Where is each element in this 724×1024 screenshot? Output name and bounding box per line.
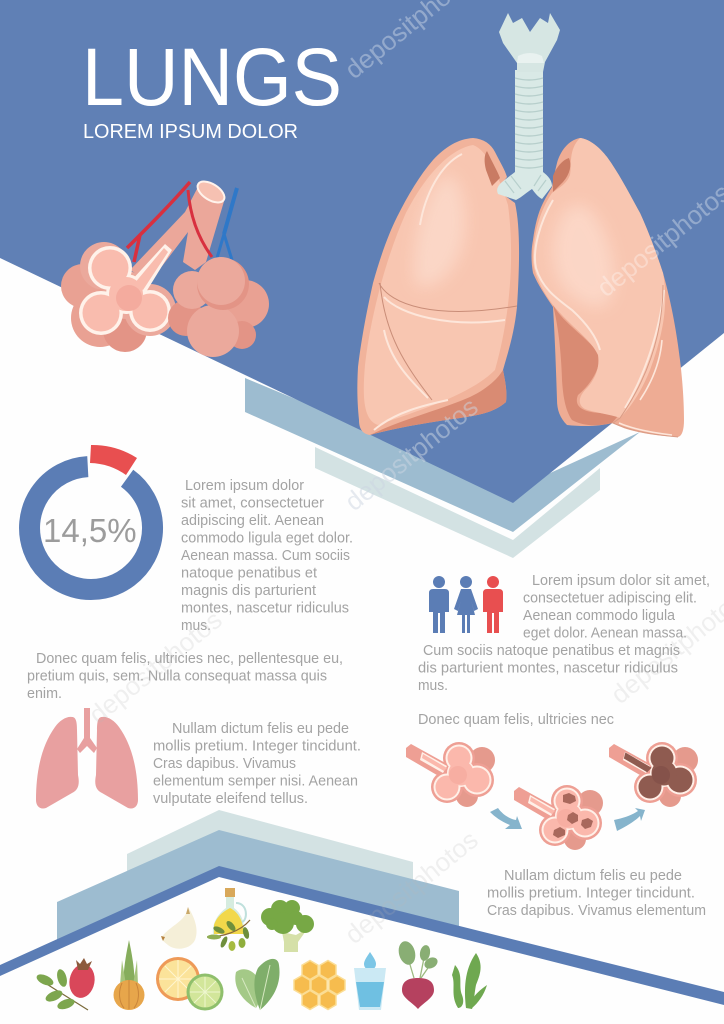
text block: donec paragraph: pretium quis, sem. Nulla consequat massa quis <box>27 668 327 684</box>
blue ring <box>30 467 153 590</box>
icon: onion <box>114 940 144 1010</box>
text block: donut description: montes, nascetur ridiculus <box>181 600 349 616</box>
pale bottom layer of top chevron <box>315 447 600 558</box>
subtitle: LOREM IPSUM DOLOR <box>83 121 298 143</box>
watermarks over page: depositphotos <box>339 824 484 950</box>
watermarks on header: depositphotos <box>339 391 484 517</box>
text block: donec paragraph: Donec quam felis, ultricies nec, pellentesque eu, <box>36 651 343 667</box>
illustration: healthy alveolus <box>406 742 495 807</box>
text block: donut description: sit amet, consectetuer <box>181 496 324 512</box>
icon: glass of water <box>354 952 386 1010</box>
text block: people description: eget dolor. Aenean massa. <box>523 626 687 642</box>
text block: nullam paragraph: elementum semper nisi. Aenean <box>153 774 358 790</box>
left lung <box>357 138 519 435</box>
illustration: lungs and trachea <box>357 13 684 437</box>
text block: donut description: magnis dis parturient <box>181 583 316 599</box>
title: LUNGS <box>82 32 342 123</box>
text block: people description <box>418 573 710 694</box>
icon: beetroot <box>396 939 440 1009</box>
sectioned cluster <box>61 264 105 308</box>
text block: nullam caption: mollis pretium. Integer tincidunt. <box>487 886 695 902</box>
percentage: 14,5% <box>43 512 137 549</box>
text block: donut description: Lorem ipsum dolor <box>185 478 304 494</box>
arrow: damaged to diseased <box>614 808 645 831</box>
watermarks over page <box>83 584 724 950</box>
text block: nullam paragraph: vulputate eleifend tellus. <box>153 791 308 807</box>
dark blue roof line <box>0 866 724 1005</box>
text block: donut description: Aenean massa. Cum sociis <box>181 548 350 564</box>
watermarks over page: depositphotos <box>83 604 228 730</box>
illustration: damaged alveolus <box>514 785 603 850</box>
text block: nullam paragraph: Cras dapibus. Vivamus <box>153 756 296 772</box>
man <box>429 576 449 633</box>
text block: donut description: adipiscing elit. Aenean <box>181 513 324 529</box>
text block: donut description: mus. <box>181 618 211 634</box>
blue header panel <box>0 0 724 503</box>
light blue layer of bottom roof <box>57 830 459 940</box>
text block: nullam caption: Nullam dictum felis eu pede <box>504 868 682 884</box>
text block: nullam paragraph: mollis pretium. Integer tincidunt. <box>153 738 361 754</box>
light blue layer of top chevron <box>245 378 640 532</box>
text block: donec paragraph: enim. <box>27 686 62 702</box>
arrow: healthy to damaged <box>490 808 522 829</box>
text block: nullam caption <box>487 868 706 919</box>
icon: olive branch <box>207 919 250 951</box>
illustration: alveoli cluster <box>61 177 269 357</box>
woman <box>454 576 478 633</box>
illustration: diseased alveolus <box>609 742 698 807</box>
pale layer of bottom roof <box>127 810 413 900</box>
text block: people description: Aenean commodo ligula <box>523 608 675 624</box>
text block: people description: dis parturient montes, nascetur ridiculus <box>418 660 678 676</box>
donut chart: 14,5% <box>30 445 153 590</box>
food icons <box>35 888 487 1011</box>
closed cluster <box>168 300 204 336</box>
text block: people description: mus. <box>418 678 448 694</box>
icon: garlic <box>161 907 197 949</box>
bronchiole tube <box>130 183 225 282</box>
icon: honeycomb <box>294 960 345 1010</box>
right lung <box>532 138 684 437</box>
trachea <box>515 70 543 178</box>
larynx <box>499 13 560 72</box>
icon: rosehip <box>35 958 97 1011</box>
icon: olive oil bottle <box>213 888 246 934</box>
text block: donut description: natoque penatibus et <box>181 566 317 582</box>
text block: donec caption: Donec quam felis, ultricies nec <box>418 712 614 728</box>
icon: three people <box>429 576 503 633</box>
text block: nullam paragraph <box>153 721 361 807</box>
icon: leafy greens <box>235 959 280 1010</box>
icon: broccoli <box>261 900 314 952</box>
watermarks on header <box>339 0 724 517</box>
vessels behind <box>127 182 190 262</box>
icon: seaweed <box>452 953 487 1009</box>
icon: small pink lungs <box>36 708 138 809</box>
icon: citrus <box>156 957 224 1010</box>
red segment <box>90 445 137 475</box>
text block: people description: consectetuer adipiscing elit. <box>523 590 697 606</box>
red man <box>483 576 503 633</box>
text block: nullam paragraph: Nullam dictum felis eu pede <box>172 721 349 737</box>
text block: nullam caption: Cras dapibus. Vivamus elementum <box>487 903 706 919</box>
text block: donut description <box>181 478 353 634</box>
text block: donec paragraph <box>27 651 343 702</box>
text block: people description: Lorem ipsum dolor sit amet, <box>532 573 710 589</box>
bronchi <box>497 172 552 200</box>
text block: donut description: commodo ligula eget dolor. <box>181 530 353 546</box>
text block: people description: Cum sociis natoque penatibus et magnis <box>423 643 680 659</box>
